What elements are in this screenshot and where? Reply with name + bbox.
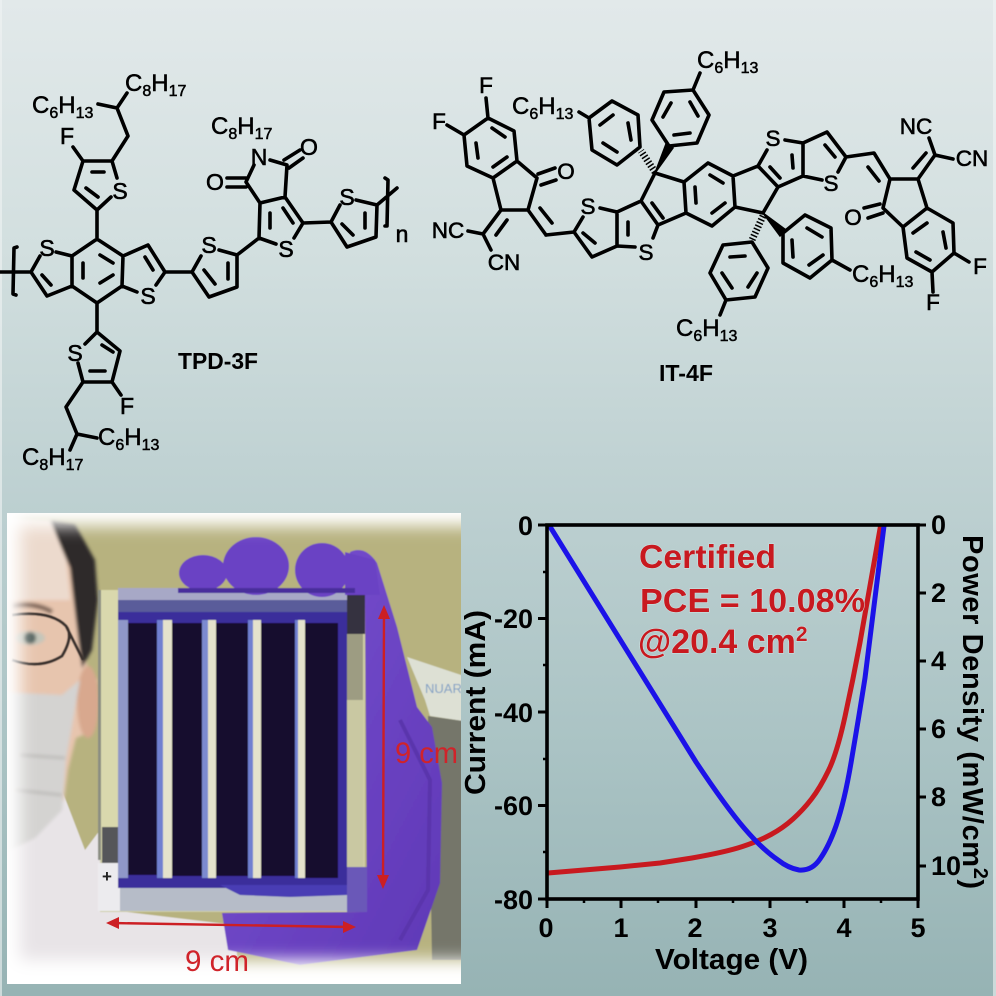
TPD-3F atom labels: H bbox=[237, 113, 255, 140]
left axis tick labels: 0 bbox=[518, 511, 533, 541]
IT-4F atom labels: H bbox=[538, 93, 556, 120]
TPD-3F atom labels: S bbox=[112, 178, 128, 204]
TPD-3F atom labels: S bbox=[39, 235, 55, 261]
IT-4F atom labels: 13 bbox=[741, 60, 758, 77]
right axis title: ) bbox=[956, 879, 988, 890]
TPD-3F atom labels: C bbox=[32, 92, 49, 119]
researcher's face bbox=[10, 520, 100, 844]
TPD-3F atom labels: C bbox=[22, 444, 39, 471]
arrow: horizontal 9 cm bbox=[106, 917, 356, 933]
lab wall bbox=[22, 514, 461, 972]
TPD-3F atom labels: 8 bbox=[39, 457, 48, 474]
TPD-3F atom labels: 13 bbox=[76, 105, 93, 122]
TPD-3F atom labels: 13 bbox=[142, 437, 159, 454]
IT-4F atom labels: S bbox=[580, 194, 596, 219]
certified efficiency callout bbox=[638, 538, 865, 661]
certified efficiency callout: @20.4 cm bbox=[638, 623, 796, 661]
TPD-3F atom labels: n bbox=[396, 221, 408, 247]
left axis title: Current (mA) bbox=[460, 610, 492, 795]
IT-4F bond skeleton bbox=[447, 73, 969, 315]
plot frame and tick marks bbox=[538, 525, 926, 908]
left axis tick labels: -20 bbox=[494, 604, 533, 634]
TPD-3F atom labels: 8 bbox=[142, 83, 151, 100]
chart: current and power density vs voltage bbox=[460, 510, 991, 976]
IT-4F atom labels: C bbox=[512, 93, 529, 120]
left axis tick labels: -60 bbox=[494, 791, 533, 821]
TPD-3F atom labels: 17 bbox=[255, 126, 272, 143]
purple glove hand bbox=[222, 550, 442, 965]
TPD-3F atom labels: S bbox=[201, 232, 217, 258]
IT-4F atom labels: C bbox=[676, 315, 693, 342]
bottom axis tick labels bbox=[538, 913, 926, 943]
IT-4F atom labels: C bbox=[852, 261, 869, 288]
IT-4F name: IT-4F bbox=[659, 360, 713, 386]
bottom axis tick labels: 1 bbox=[613, 913, 629, 943]
TPD-3F atom labels: C bbox=[211, 113, 228, 140]
right axis tick labels: 2 bbox=[931, 578, 946, 608]
bottom axis tick labels: 4 bbox=[836, 913, 852, 943]
IT-4F atom labels: NC bbox=[900, 114, 932, 139]
IT-4F atom labels: NC bbox=[432, 218, 464, 243]
TPD-3F atom labels: H bbox=[124, 424, 142, 451]
certified efficiency callout: PCE = 10.08% bbox=[640, 582, 865, 619]
five dark solar cell strips bbox=[128, 623, 338, 878]
TPD-3F atom labels: S bbox=[140, 283, 156, 309]
right axis tick labels: 8 bbox=[931, 782, 946, 812]
lab equipment: NUAR bbox=[425, 681, 462, 696]
TPD-3F atom labels: S bbox=[278, 236, 294, 262]
IT-4F atom labels: CN bbox=[488, 250, 520, 275]
IT-4F atom labels: 6 bbox=[693, 328, 702, 345]
IT-4F atom labels: 13 bbox=[720, 328, 737, 345]
bottom axis tick labels: 5 bbox=[910, 913, 926, 943]
TPD-3F atom labels: S bbox=[67, 340, 83, 366]
IT-4F atom labels: 6 bbox=[714, 60, 723, 77]
molecule: TPD-3F polymer bbox=[0, 70, 408, 474]
bottom axis tick labels: 2 bbox=[687, 913, 703, 943]
right axis title: 2 bbox=[969, 868, 991, 879]
TPD-3F name: TPD-3F bbox=[178, 348, 258, 374]
TPD-3F bond skeleton bbox=[0, 93, 397, 450]
IT-4F atom labels: F bbox=[926, 290, 940, 315]
left axis tick labels: -80 bbox=[494, 885, 533, 915]
molecule: IT-4F acceptor bbox=[432, 47, 988, 386]
TPD-3F atom labels: 8 bbox=[228, 126, 237, 143]
IT-4F atom labels: S bbox=[638, 240, 654, 265]
label: vertical 9 cm: 9 cm bbox=[395, 737, 458, 770]
TPD-3F atom labels: C bbox=[98, 424, 115, 451]
right axis tick labels bbox=[931, 510, 961, 881]
label: horizontal 9 cm: 9 cm bbox=[185, 945, 249, 978]
IT-4F atom labels: H bbox=[723, 47, 741, 74]
bottom axis tick labels: 3 bbox=[762, 913, 778, 943]
IT-4F atom labels: H bbox=[702, 315, 720, 342]
TPD-3F atom labels: H bbox=[48, 444, 66, 471]
silver gaps between cells bbox=[157, 620, 305, 878]
lab equipment bbox=[406, 656, 461, 960]
TPD-3F atom labels: 17 bbox=[169, 83, 186, 100]
TPD-3F atom labels: 6 bbox=[49, 105, 58, 122]
panel: photo of 9 cm module bbox=[0, 513, 470, 996]
glasses bbox=[12, 614, 83, 664]
right axis title: Power Density (mW/cm bbox=[956, 535, 988, 868]
certified efficiency callout: 2 bbox=[796, 623, 808, 646]
IT-4F atom labels: 6 bbox=[869, 274, 878, 291]
arrow: vertical 9 cm bbox=[377, 605, 390, 889]
TPD-3F atom labels: 6 bbox=[115, 437, 124, 454]
TPD-3F atom labels: H bbox=[58, 92, 76, 119]
IT-4F atom labels: 6 bbox=[529, 106, 538, 123]
certified efficiency callout: Certified bbox=[639, 538, 776, 575]
right axis tick labels: 4 bbox=[931, 646, 946, 676]
TPD-3F atom labels: H bbox=[151, 70, 169, 97]
glass substrate bbox=[98, 588, 367, 912]
IT-4F atom labels: CN bbox=[956, 146, 988, 171]
IT-4F atom labels: F bbox=[479, 73, 493, 98]
IT-4F atom labels bbox=[432, 47, 988, 345]
IT-4F atom labels: F bbox=[432, 109, 446, 134]
IT-4F atom labels: H bbox=[878, 261, 896, 288]
TPD-3F atom labels: N bbox=[251, 144, 267, 170]
stereo wedge bonds bbox=[641, 144, 786, 240]
right axis tick labels: 0 bbox=[931, 510, 946, 540]
TPD-3F atom labels: S bbox=[339, 184, 355, 210]
TPD-3F atom labels bbox=[22, 70, 408, 474]
photo scene bbox=[0, 513, 470, 996]
glove fingertips bbox=[178, 537, 380, 597]
IT-4F atom labels: O bbox=[557, 159, 575, 184]
IT-4F atom labels: S bbox=[823, 171, 839, 196]
plus mark: + bbox=[102, 867, 112, 886]
IT-4F atom labels: O bbox=[844, 205, 862, 230]
x axis title: Voltage (V) bbox=[655, 944, 808, 976]
IT-4F atom labels: F bbox=[973, 254, 987, 279]
left axis tick labels: -40 bbox=[494, 698, 533, 728]
IT-4F atom labels: 13 bbox=[556, 106, 573, 123]
IT-4F atom labels: S bbox=[765, 126, 781, 151]
TPD-3F atom labels: O bbox=[206, 169, 224, 195]
TPD-3F atom labels: C bbox=[125, 70, 142, 97]
blue power density curve bbox=[549, 525, 884, 870]
bottom axis tick labels: 0 bbox=[538, 913, 554, 943]
IT-4F atom labels: 13 bbox=[896, 274, 913, 291]
TPD-3F atom labels: F bbox=[60, 123, 74, 149]
TPD-3F atom labels: O bbox=[300, 134, 318, 160]
IT-4F atom labels: C bbox=[697, 47, 714, 74]
right axis tick labels: 6 bbox=[931, 714, 946, 744]
TPD-3F atom labels: F bbox=[120, 393, 134, 419]
right axis tick labels: 10 bbox=[931, 851, 961, 881]
left axis tick labels bbox=[494, 511, 533, 915]
lab coat bbox=[9, 794, 238, 971]
TPD-3F atom labels: 17 bbox=[66, 457, 83, 474]
red current-voltage curve bbox=[548, 526, 880, 873]
